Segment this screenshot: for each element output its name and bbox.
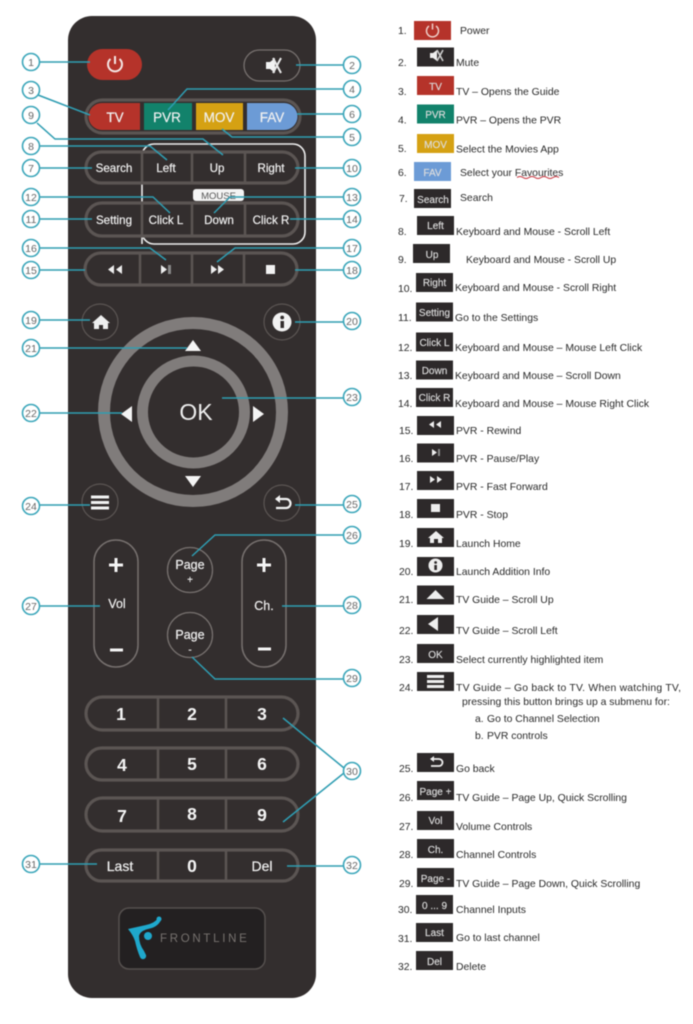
colour buttons row: TV (106, 110, 124, 125)
callout 9 (22, 106, 223, 155)
item 14 click r (398, 388, 650, 410)
item 13 down: Down (422, 366, 447, 377)
item 1 power: Power (460, 26, 490, 37)
callout 14 (290, 210, 360, 228)
item 6 fav: 6. (398, 168, 407, 179)
item 21 scroll up: 21. (399, 595, 413, 606)
page down button (168, 612, 212, 658)
item 27 vol: Volume Controls (456, 822, 532, 833)
callout 7 (22, 160, 92, 176)
number row 4 (86, 850, 298, 881)
callout 11: 11 (26, 214, 37, 226)
item 20 info (399, 557, 550, 578)
item 31 last (398, 923, 540, 945)
item 28 ch: Ch. (428, 845, 443, 856)
callout 26: 26 (346, 530, 358, 542)
item 9 up: Up (426, 250, 439, 261)
item 24 menu: b. (475, 731, 484, 742)
callout 12: 12 (25, 192, 37, 204)
item 24 menu: pressing this button brings up a submenu for: (462, 697, 670, 708)
callout 13: 13 (346, 192, 358, 204)
item 1 power: 1. (398, 26, 407, 37)
item 26 page plus: Page + (420, 787, 452, 798)
item 8 left: Left (427, 221, 444, 232)
item 11 setting (398, 302, 538, 324)
item 10 right: Keyboard and Mouse - Scroll Right (455, 283, 616, 294)
callout 4 (168, 80, 360, 110)
item 5 mov: Select the Movies App (456, 144, 559, 156)
item 10 right: Right (423, 278, 446, 289)
item 30 channel inputs: 30. (398, 905, 412, 916)
back button (264, 485, 300, 521)
item 13 down: 13. (398, 371, 412, 382)
callout 1 (22, 54, 90, 70)
item 12 click l: Keyboard and Mouse – Mouse Left Click (455, 343, 643, 354)
item 28 ch: 28. (399, 850, 413, 861)
callout 20: 20 (346, 316, 358, 328)
callout 17 (217, 240, 360, 262)
item 10 right (398, 273, 616, 295)
directional ring: OK (179, 399, 213, 425)
callout 15: 15 (25, 265, 37, 277)
item 1 power (398, 21, 490, 40)
item 19 home: Launch Home (456, 539, 521, 550)
number row 4: Last (107, 858, 133, 874)
item 4 pvr: 4. (398, 116, 407, 126)
item 9 up: 9. (398, 255, 407, 266)
item 6 fav: FAV (423, 168, 442, 179)
callout 19: 19 (25, 315, 37, 327)
item 21 scroll up: TV Guide – Scroll Up (456, 595, 554, 606)
item 23 ok (399, 644, 603, 666)
callout 4: 4 (349, 84, 355, 96)
channel rocker: Ch. (254, 599, 274, 613)
item 27 vol: 27. (399, 822, 413, 833)
mouse group outline: MOUSE (201, 191, 236, 202)
callout 19 (22, 312, 90, 328)
volume rocker: Vol (108, 597, 126, 611)
item 10 right: 10. (398, 284, 412, 295)
item 32 del: 32. (398, 962, 412, 973)
item 31 last: Last (425, 928, 444, 939)
item 2 mute (398, 48, 479, 69)
item 11 setting: Setting (419, 308, 450, 319)
callout 17: 17 (346, 243, 358, 255)
setting and click row: Down (204, 214, 234, 227)
item 25 back: 25. (399, 764, 413, 775)
power button (87, 49, 142, 80)
callout 31: 31 (25, 859, 37, 871)
item 17 fast forward: PVR - Fast Forward (456, 482, 548, 493)
mute button (244, 50, 300, 81)
number row 2 (86, 748, 298, 780)
item 18 stop: 18. (399, 510, 413, 521)
callout 7: 7 (28, 163, 34, 175)
search and navigation row: Right (257, 162, 285, 175)
item 14 click r: Click R (419, 393, 450, 404)
callout 6 (297, 106, 360, 122)
item 4 pvr: PVR (425, 110, 446, 121)
page up button: Page (175, 558, 205, 572)
frontline logo (119, 908, 265, 969)
setting and click row (86, 203, 298, 236)
colour buttons row: FAV (260, 110, 284, 125)
item 13 down (398, 360, 621, 382)
item 24 menu: Go to Channel Selection (487, 714, 600, 725)
item 12 click l: Click L (419, 338, 450, 349)
callout 15 (22, 262, 85, 278)
callout 23 (222, 388, 360, 406)
frontline logo: FRONTLINE (160, 933, 249, 945)
callout 25 (295, 496, 360, 512)
info button (264, 304, 300, 340)
item 12 click l (398, 332, 643, 354)
item 7 search: 7. (399, 194, 408, 205)
callout 10 (295, 160, 360, 176)
callout 1: 1 (28, 57, 34, 69)
item 26 page plus: TV Guide – Page Up, Quick Scrolling (456, 793, 627, 804)
item 25 back: Go back (456, 764, 496, 775)
item 15 rewind: 15. (399, 426, 413, 437)
item 8 left: 8. (398, 227, 407, 238)
directional ring (104, 323, 282, 501)
item 28 ch: Channel Controls (456, 850, 536, 861)
item 24 menu: 24. (399, 683, 413, 694)
number row 3: 9 (257, 805, 267, 825)
callout 22: 22 (25, 408, 37, 420)
item 24 menu: PVR controls (487, 731, 548, 742)
colour buttons row (86, 100, 300, 133)
callout 27: 27 (25, 601, 37, 613)
number row 1: 2 (187, 704, 197, 724)
callout 24: 24 (25, 501, 37, 513)
callout 25: 25 (346, 499, 358, 511)
search and navigation row (86, 152, 298, 183)
callout 10: 10 (346, 163, 358, 175)
item 14 click r: Keyboard and Mouse – Mouse Right Click (455, 399, 650, 410)
volume rocker (94, 540, 138, 667)
item 16 pause play: PVR - Pause/Play (456, 454, 540, 465)
item 26 page plus: 26. (399, 793, 413, 804)
item 22 scroll left: TV Guide – Scroll Left (456, 626, 558, 637)
item 27 vol (399, 811, 532, 833)
callout 14: 14 (346, 214, 358, 226)
colour buttons row: PVR (153, 110, 181, 125)
item 17 fast forward: 17. (399, 482, 413, 493)
item 19 home (399, 528, 521, 550)
search and navigation row: Search (96, 162, 132, 175)
home button (82, 304, 118, 340)
item 23 ok: 23. (399, 655, 413, 666)
item 24 menu: a. (475, 714, 484, 725)
callout 30: 30 (346, 766, 358, 778)
item 30 channel inputs: Channel Inputs (456, 905, 526, 916)
callout 8 (22, 138, 167, 160)
callout 2: 2 (349, 60, 355, 72)
callout 24 (22, 498, 90, 514)
item 11 setting: Go to the Settings (455, 313, 538, 324)
item 18 stop: PVR - Stop (456, 510, 508, 521)
item 7 search (399, 189, 493, 208)
item 3 tv: TV – Opens the Guide (456, 87, 560, 98)
callout 28 (282, 596, 360, 614)
item 28 ch (399, 839, 536, 861)
page up button: + (187, 575, 193, 586)
callout 31 (22, 856, 97, 872)
item 9 up: Keyboard and Mouse - Scroll Up (466, 255, 616, 266)
item 4 pvr (398, 104, 562, 126)
item 3 tv (398, 76, 560, 98)
callout 16 (22, 240, 166, 260)
callout 11 (22, 210, 92, 228)
callout 3 (22, 82, 90, 115)
item 5 mov: 5. (398, 144, 407, 155)
callout 5 (222, 128, 360, 146)
item 15 rewind: PVR - Rewind (456, 426, 521, 437)
item 13 down: Keyboard and Mouse – Scroll Down (455, 371, 621, 382)
item 32 del: Delete (456, 962, 486, 973)
number row 2: 6 (257, 754, 267, 774)
callout 9: 9 (28, 110, 34, 122)
item 31 last: 31. (398, 934, 412, 945)
item 5 mov (398, 134, 559, 156)
callout 20 (295, 312, 360, 330)
item 3 tv: TV (429, 82, 442, 93)
item 14 click r: 14. (398, 399, 412, 410)
number row 1: 3 (257, 704, 267, 724)
callout 18 (295, 262, 360, 278)
menu button (82, 484, 118, 520)
item 16 pause play: 16. (399, 454, 413, 465)
number row 3: 7 (117, 806, 127, 826)
item 29 page minus: 29. (399, 879, 413, 890)
number row 2: 5 (187, 754, 197, 774)
number row 1 (86, 697, 298, 730)
number row 2: 4 (117, 755, 127, 775)
remote body (68, 16, 316, 998)
item 22 scroll left: 22. (399, 626, 413, 637)
item 22 scroll left (399, 615, 558, 637)
colour buttons row: MOV (204, 110, 234, 125)
item 26 page plus (399, 781, 627, 804)
item 2 mute: 2. (398, 58, 407, 69)
search and navigation row: Up (210, 162, 224, 175)
search and navigation row: Left (156, 162, 176, 175)
legend list (398, 21, 681, 973)
item 24 menu (399, 672, 681, 742)
item 9 up (398, 244, 616, 266)
setting and click row: Click L (149, 214, 184, 227)
callout 21: 21 (25, 343, 37, 355)
item 12 click l: 12. (398, 343, 412, 354)
item 3 tv: 3. (398, 87, 407, 98)
item 29 page minus (399, 868, 640, 890)
callout 12 (22, 188, 170, 213)
item 5 mov: MOV (424, 140, 447, 151)
callout numbers and leader lines (22, 54, 360, 874)
callout 29 (192, 657, 360, 686)
callout 32: 32 (346, 860, 358, 872)
callout 5: 5 (349, 132, 355, 144)
item 29 page minus: TV Guide – Page Down, Quick Scrolling (456, 879, 640, 890)
item 31 last: Go to last channel (456, 933, 540, 944)
callout 29: 29 (346, 673, 358, 685)
callout 23: 23 (346, 392, 358, 404)
callout 13 (214, 188, 360, 213)
number row 3 (86, 798, 298, 831)
item 29 page minus: Page - (421, 874, 450, 885)
item 7 search: Search (417, 195, 449, 206)
number row 3: 8 (187, 804, 197, 824)
item 7 search: Search (460, 193, 493, 204)
number row 1: 1 (116, 704, 126, 724)
item 25 back (399, 753, 496, 775)
item 11 setting: 11. (398, 313, 412, 324)
item 15 rewind (399, 416, 521, 437)
item 32 del: Del (427, 957, 442, 968)
callout 2 (296, 56, 360, 74)
remote control (68, 16, 316, 998)
item 20 info: Launch Addition Info (456, 567, 550, 578)
item 8 left (398, 216, 610, 238)
item 30 channel inputs (398, 895, 526, 916)
callout 18: 18 (346, 265, 358, 277)
item 30 channel inputs: 0 ... 9 (422, 901, 447, 912)
item 19 home: 19. (399, 539, 413, 550)
callout 3: 3 (28, 85, 34, 97)
callout 21 (22, 340, 187, 356)
callout 27 (22, 598, 100, 614)
playback row (85, 253, 297, 285)
item 23 ok: Select currently highlighted item (456, 655, 603, 666)
item 6 fav (398, 162, 563, 181)
setting and click row: Click R (253, 214, 289, 227)
item 17 fast forward (399, 471, 548, 493)
item 20 info: 20. (399, 567, 413, 578)
item 21 scroll up (399, 586, 554, 606)
item 2 mute: Mute (456, 58, 479, 69)
page down button: Page (175, 628, 205, 642)
setting and click row: Setting (96, 214, 132, 227)
item 8 left: Keyboard and Mouse - Scroll Left (456, 227, 610, 238)
callout 30 (283, 718, 360, 822)
item 4 pvr: PVR – Opens the PVR (456, 116, 562, 126)
page down button: - (188, 645, 192, 656)
callout 16: 16 (25, 243, 37, 255)
callout 8: 8 (28, 141, 34, 153)
callout 6: 6 (349, 109, 355, 121)
item 6 fav: Select your Favourites (460, 168, 563, 179)
item 32 del (398, 951, 486, 973)
item 23 ok: OK (428, 650, 443, 661)
number row 4: 0 (187, 856, 197, 876)
item 27 vol: Vol (429, 816, 442, 827)
page up button (168, 548, 212, 592)
channel rocker (242, 540, 286, 667)
mouse group outline (142, 144, 305, 244)
item 16 pause play (399, 444, 540, 465)
number row 4: Del (251, 858, 273, 874)
callout 28: 28 (346, 600, 358, 612)
item 18 stop (399, 499, 508, 521)
callout 22 (22, 404, 122, 422)
callout 32 (287, 856, 360, 874)
callout 26 (192, 526, 360, 556)
item 24 menu: TV Guide – Go back to TV. When watching TV, (456, 683, 681, 694)
